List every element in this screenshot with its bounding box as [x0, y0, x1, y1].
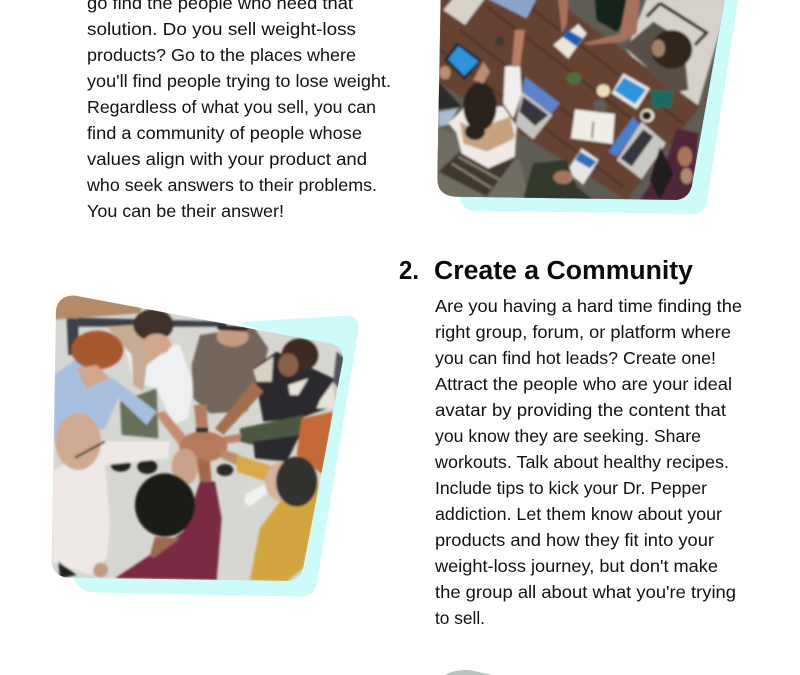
text block: find your audience: values align with your product and	[87, 149, 367, 169]
laptop right	[608, 117, 640, 157]
text block: create a community: avatar by providing the content that	[435, 400, 726, 420]
text block: create a community: to sell.	[435, 608, 485, 628]
photo: hands joined in a circle with cyan backing	[47, 292, 358, 597]
tablet left	[444, 42, 482, 80]
cyan backing shape 2	[73, 316, 358, 597]
text block: find your audience: products? Go to the places where	[87, 45, 356, 65]
text block: find your audience: who seek answers to their problems.	[86, 175, 377, 195]
text block: find your audience: Regardless of what you sell, you can	[87, 97, 376, 117]
back person white shirt with scarf	[123, 338, 193, 425]
photo contents 2	[47, 292, 350, 585]
plant and cups	[567, 72, 581, 84]
text block: create a community: you know they are seeking. Share	[435, 426, 701, 446]
red-hair person blue shirt	[54, 360, 157, 442]
bald man with white shirt	[52, 442, 170, 575]
cyan backing shape 1	[459, 0, 738, 214]
text block: find your audience: solution. Do you sell weight-loss	[87, 19, 356, 39]
heading: 2. Create a Community: 2.	[399, 257, 419, 285]
text block: create a community: you can find hot leads? Create one!	[435, 348, 716, 368]
text block: create a community: Include tips to kick your Dr. Pepper	[435, 478, 707, 498]
table	[440, 0, 700, 200]
text block: find your audience: You can be their answer!	[87, 201, 284, 221]
chair bottom-left	[438, 148, 517, 197]
text block: create a community: Are you having a hard time finding the	[435, 296, 742, 316]
bottom person green	[523, 160, 593, 200]
photo fragment: next section image top	[445, 670, 492, 675]
text block: create a community: addiction. Let them know about your	[435, 504, 722, 524]
green sleeve and orange hair	[240, 415, 303, 445]
photo: team around a table with cyan backing	[420, 0, 738, 214]
yellow shirt man	[220, 448, 240, 465]
heading: 2. Create a Community: Create a Community	[434, 257, 694, 285]
hands	[179, 431, 227, 462]
shoes	[111, 458, 131, 472]
laptop left	[522, 77, 560, 113]
text block: create a community	[434, 296, 742, 628]
bottom right person	[640, 128, 698, 200]
notebook	[571, 109, 615, 144]
text block: create a community: products and how they fit into your	[435, 530, 714, 550]
text block: create a community: the group all about what you're trying	[435, 582, 736, 602]
top-left laptops	[443, 0, 485, 25]
brown shirt person	[192, 327, 268, 413]
text block: create a community: weight-loss journey, but don't make	[434, 556, 718, 576]
tablet right	[612, 73, 650, 109]
text block: create a community: Attract the people who are your ideal	[435, 374, 732, 394]
maroon shirt man	[115, 482, 222, 580]
person curly top right	[624, 22, 688, 93]
phone notebooks	[553, 24, 587, 59]
woman shirt and back	[448, 107, 517, 168]
text block: create a community: right group, forum, or platform where	[435, 322, 731, 342]
photo contents 1	[420, 0, 730, 203]
text block: find your audience	[86, 0, 391, 221]
text block: find your audience: you'll find people trying to lose weight.	[87, 71, 391, 91]
text block: create a community: workouts. Talk about healthy recipes.	[434, 452, 729, 472]
top person	[594, 0, 627, 32]
vest person	[253, 352, 337, 422]
text block: find your audience: find a community of people whose	[87, 123, 362, 143]
